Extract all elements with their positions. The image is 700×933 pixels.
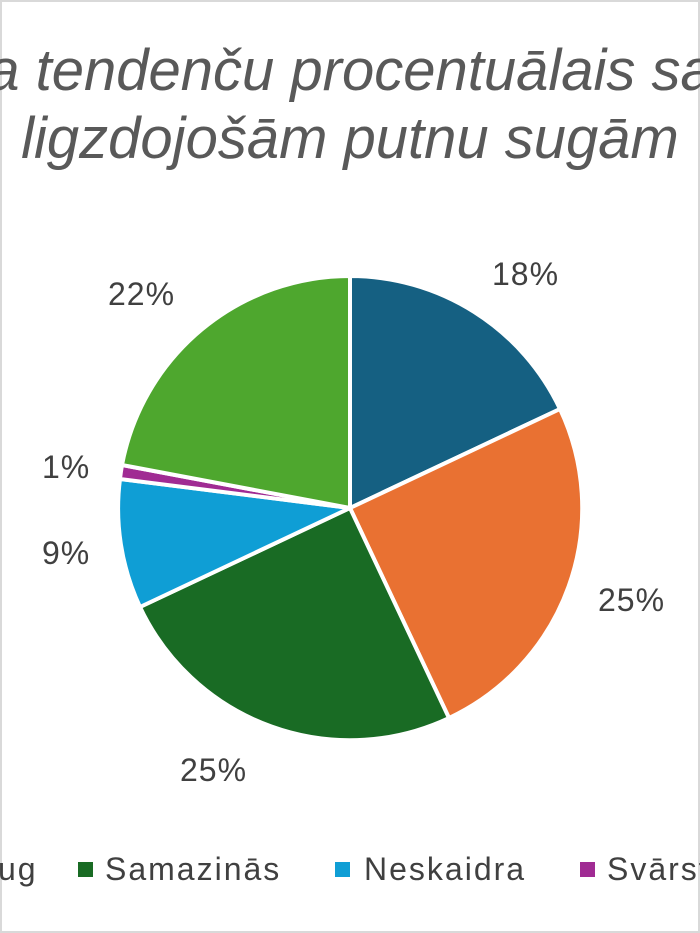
legend — [0, 851, 700, 887]
slice: 22% — [122, 276, 350, 508]
label 18%: 18% — [492, 256, 559, 292]
slice: 25% samazinās — [140, 508, 449, 740]
slice: 1% svārstās — [120, 465, 350, 508]
title: ligzdojošām putnu sugām — [21, 106, 679, 171]
legend: Neskaidra — [364, 851, 526, 887]
label 1%: 1% — [42, 449, 90, 485]
slice: 9% neskaidra — [118, 479, 350, 607]
label 9%: 9% — [42, 535, 90, 571]
label 25% right: 25% — [598, 582, 665, 618]
slice: 18% — [350, 276, 560, 508]
label 25% bottom: 25% — [180, 752, 247, 788]
legend: Samazinās — [105, 851, 281, 887]
title — [0, 38, 700, 171]
label 22%: 22% — [108, 276, 175, 312]
slice: 25% orange — [350, 409, 582, 718]
